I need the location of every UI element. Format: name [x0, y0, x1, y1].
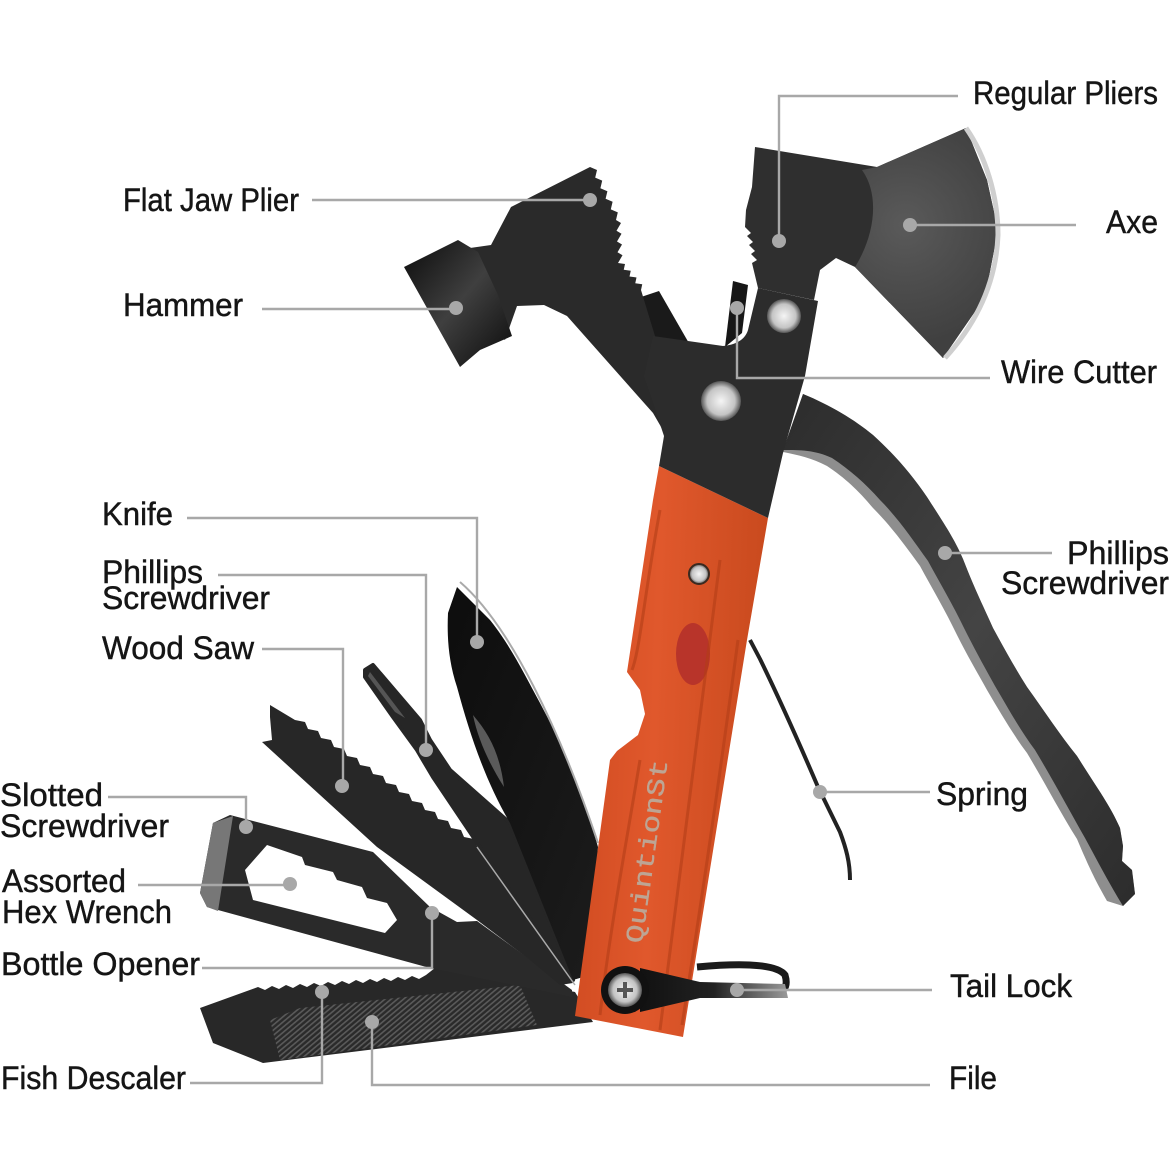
label: Slotted Screwdriver: Screwdriver — [0, 808, 169, 844]
icon: tail lock — [601, 965, 788, 1014]
icon: spring — [750, 640, 850, 880]
label: Wood Saw: Wood Saw — [102, 630, 255, 666]
label: Spring: Spring — [936, 776, 1028, 812]
label: Knife: Knife — [102, 496, 173, 532]
label: Bottle Opener: Bottle Opener — [1, 946, 200, 982]
label: Tail Lock: Tail Lock — [950, 968, 1073, 1004]
label: File: File — [949, 1060, 997, 1096]
label: Axe: Axe — [1106, 204, 1158, 240]
label: Wire Cutter: Wire Cutter — [1001, 354, 1157, 390]
label: Fish Descaler: Fish Descaler — [1, 1060, 186, 1096]
icon: small pivot bolt — [767, 299, 801, 333]
icon: knife blade — [448, 582, 598, 980]
label: Phillips Screwdriver left — [102, 554, 270, 616]
handle brand text: QuintionSt — [621, 758, 676, 945]
label: Assorted Hex Wrench: Assorted — [2, 863, 126, 899]
label: Phillips Screwdriver left: Screwdriver — [102, 580, 270, 616]
icon: main pivot bolt — [701, 381, 741, 421]
icon: hammer and flat jaw — [404, 167, 690, 440]
icon: plier pivot body — [644, 281, 818, 518]
icon: wood handle — [575, 466, 768, 1037]
icon: phillips screwdriver blade — [365, 665, 577, 985]
label: Phillips Screwdriver left: Phillips — [102, 554, 203, 590]
leader dots — [239, 193, 952, 1029]
label: Flat Jaw Plier: Flat Jaw Plier — [123, 182, 299, 218]
icon: file tool — [200, 964, 593, 1063]
label: Slotted Screwdriver: Slotted — [0, 777, 103, 813]
label: Assorted Hex Wrench: Hex Wrench — [2, 894, 172, 930]
label: Assorted Hex Wrench — [2, 863, 172, 930]
label: Phillips Screwdriver right — [1001, 535, 1169, 601]
label: Phillips Screwdriver right: Screwdriver — [1001, 565, 1169, 601]
label: Hammer: Hammer — [123, 287, 243, 323]
leader lines — [108, 96, 1076, 1085]
label: Slotted Screwdriver — [0, 777, 169, 844]
icon: handle rivet — [689, 564, 709, 584]
icon: axe head — [745, 128, 998, 358]
icon: right plier handle (Phillips screwdriver) — [783, 394, 1135, 906]
label: Regular Pliers: Regular Pliers — [973, 75, 1158, 111]
label: Phillips Screwdriver right: Phillips — [1067, 535, 1169, 571]
icon: wood saw — [262, 705, 573, 985]
icon: hex wrench and bottle opener — [200, 815, 572, 997]
